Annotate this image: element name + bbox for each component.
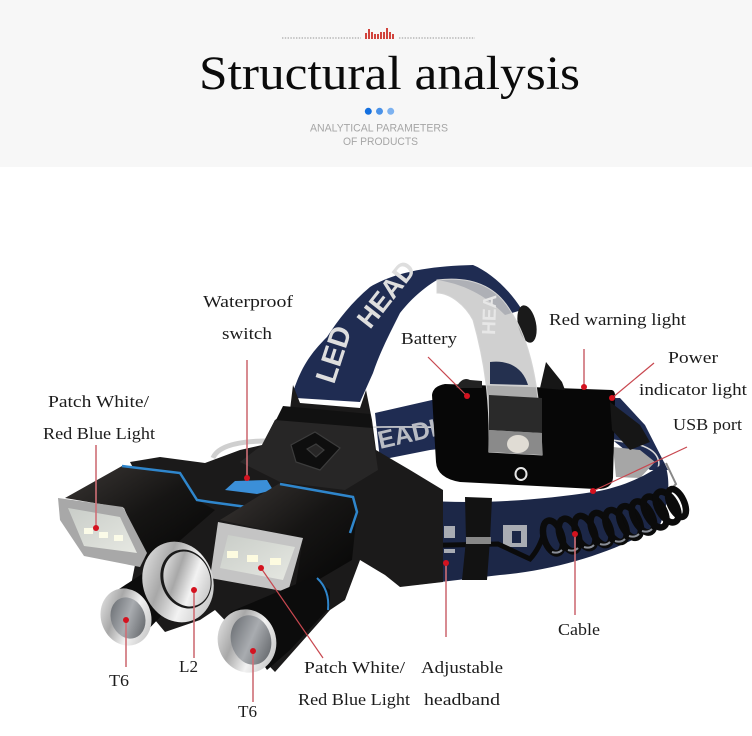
left T6 lens	[93, 572, 165, 653]
thin white loop	[340, 427, 659, 478]
callout: right T6: T6	[238, 702, 257, 721]
L2 lens	[131, 532, 225, 632]
callout: waterproof switch: switch	[222, 324, 273, 343]
coiled cable	[400, 486, 690, 559]
dotted rule with red equalizer ornament	[282, 28, 475, 39]
waterproof switch	[225, 480, 273, 494]
lettering counter	[512, 531, 521, 543]
transparent strap	[437, 279, 542, 455]
three blue dots	[365, 108, 394, 115]
callout: battery: Battery	[401, 329, 458, 348]
title: Structural analysis	[199, 47, 580, 100]
callout: cable: Cable	[558, 620, 600, 639]
callout: red warning light	[549, 310, 686, 390]
callout: L2	[179, 587, 198, 676]
callout: left patch light	[43, 392, 155, 531]
callout: left T6	[109, 617, 129, 690]
callout: cable	[558, 531, 600, 639]
callout: USB port	[590, 415, 742, 494]
header panel	[0, 0, 752, 167]
right T6 lens	[209, 601, 285, 681]
callout: power indicator light: Power	[668, 348, 718, 367]
subtitle: OF PRODUCTS	[343, 136, 418, 148]
callout: right patch light: Red Blue Light	[298, 690, 410, 709]
rear lower strap behind battery	[375, 398, 668, 470]
central mount and rear body mass	[130, 385, 443, 672]
strap hanger	[666, 463, 676, 490]
mount emblem	[291, 432, 340, 470]
charging port	[516, 468, 526, 480]
callout: adjustable headband: Adjustable	[421, 658, 503, 677]
headlamp illustration	[58, 255, 690, 681]
front strap lettering	[444, 525, 527, 553]
rear knob	[514, 304, 540, 344]
callout: right T6	[238, 648, 257, 721]
callout: right patch light: Patch White/	[304, 658, 405, 677]
callout: left patch light: Patch White/	[48, 392, 149, 411]
subtitle	[310, 122, 448, 148]
right patch lamp	[210, 483, 357, 592]
left patch lamp	[58, 466, 247, 567]
callout: waterproof switch: Waterproof	[203, 292, 293, 311]
strap lettering: LED	[310, 322, 359, 387]
top strap	[293, 265, 522, 402]
callout: power indicator light	[609, 348, 747, 401]
strap stud	[507, 435, 529, 453]
tube blue ring	[317, 578, 328, 610]
callout: adjustable headband	[421, 560, 503, 709]
rear strap lettering: EADI	[375, 414, 440, 455]
strap lettering: HEAD	[351, 255, 422, 334]
callout: L2: L2	[179, 657, 198, 676]
callout: battery	[401, 329, 470, 399]
headlamp illustration: HEA	[479, 294, 501, 335]
coil gloss highlights	[552, 529, 652, 553]
callout: USB port: USB port	[673, 415, 742, 434]
front lower strap	[415, 462, 668, 585]
battery case	[432, 384, 615, 489]
callout: red warning light: Red warning light	[549, 310, 686, 329]
callout: right patch light	[258, 565, 410, 709]
callout: power indicator light: indicator light	[639, 380, 747, 399]
callout: left patch light: Red Blue Light	[43, 424, 155, 443]
callout: left T6: T6	[109, 671, 129, 690]
callout: adjustable headband: headband	[424, 690, 501, 709]
right lower tube	[230, 577, 330, 670]
subtitle: ANALYTICAL PARAMETERS	[310, 122, 448, 134]
callout: waterproof switch	[203, 292, 293, 481]
front-left loop behind mount	[213, 441, 268, 458]
strap lettering	[310, 255, 422, 387]
cable clip	[462, 497, 492, 580]
